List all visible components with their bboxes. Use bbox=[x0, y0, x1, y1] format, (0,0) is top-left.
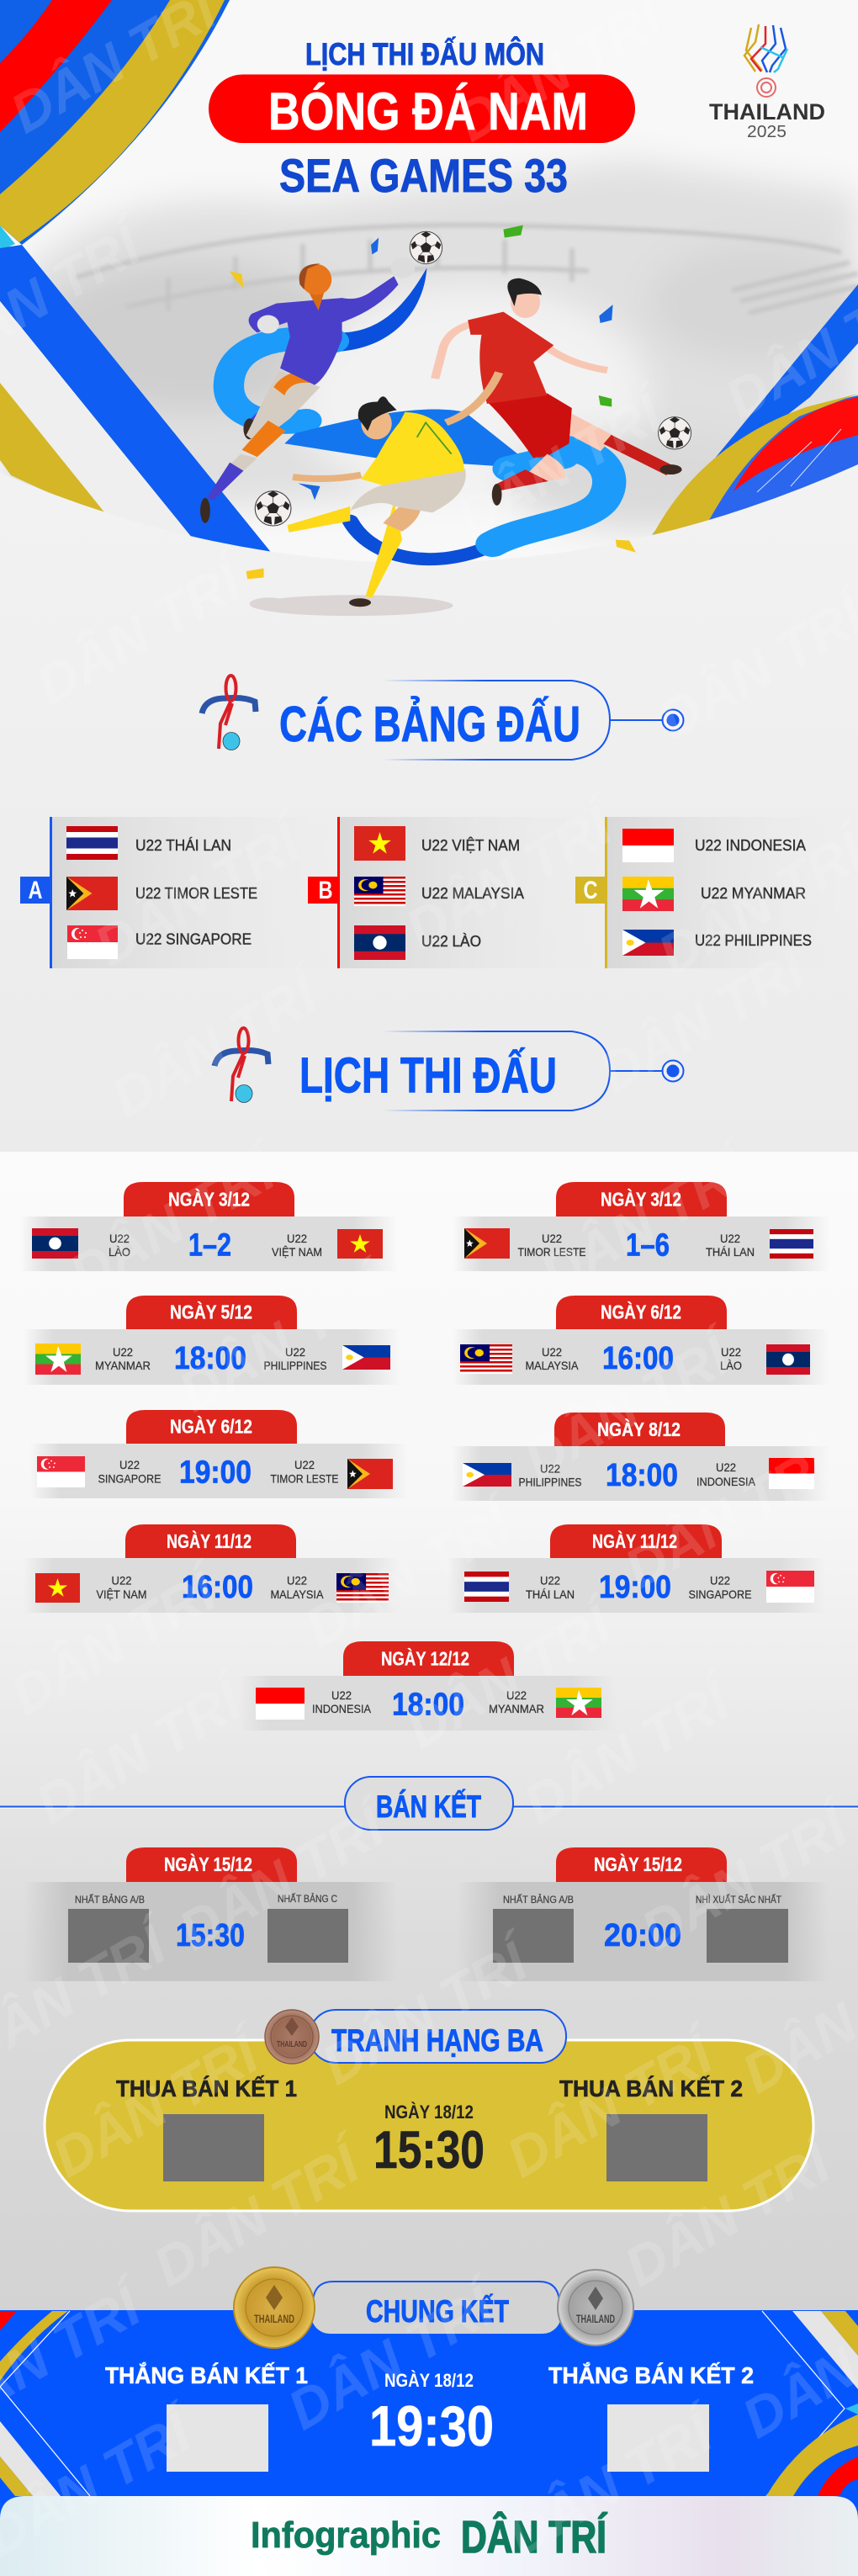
heading: các bảng đấu: CÁC BẢNG ĐẤU bbox=[279, 696, 580, 752]
panel: group A: U22 THÁI LAN bbox=[135, 837, 231, 854]
watermarks: DÂN TRÍ bbox=[614, 1429, 848, 1600]
match card: Lào vs Việt Nam: VIỆT NAM bbox=[272, 1245, 322, 1259]
match card: Việt Nam vs Malaysia: VIỆT NAM bbox=[96, 1587, 146, 1601]
kick-off time: 16:00 bbox=[602, 1341, 674, 1376]
match card: Lào vs Việt Nam: LÀO bbox=[109, 1245, 130, 1259]
final: team labels and time: 19:30 bbox=[369, 2394, 494, 2458]
kick-off time: 18:00 bbox=[174, 1341, 246, 1376]
match card: Indonesia vs Myanmar: NGÀY 12/12 bbox=[381, 1647, 469, 1669]
match card: Lào vs Việt Nam: NGÀY 3/12 bbox=[168, 1188, 250, 1210]
kick-off time: 20:00 bbox=[604, 1918, 681, 1953]
title: sea games 33: SEA GAMES 33 bbox=[279, 149, 568, 202]
confetti bbox=[230, 225, 636, 579]
heading: lịch thi đấu bbox=[214, 1028, 683, 1110]
match card: Thái Lan vs Singapore: U22 bbox=[710, 1573, 730, 1587]
team placeholder bbox=[707, 1909, 788, 1963]
match card: Timor Leste vs Thái Lan: TIMOR LESTE bbox=[518, 1245, 585, 1259]
match card: Singapore vs Timor Leste: SINGAPORE bbox=[98, 1472, 162, 1486]
match card: Malaysia vs Lào: LÀO bbox=[720, 1359, 742, 1372]
watermarks: DÂN TRÍ bbox=[278, 2271, 511, 2441]
team placeholder bbox=[607, 2404, 709, 2472]
flag: Vietnam bbox=[354, 826, 405, 861]
icon: gold medal bbox=[234, 2267, 315, 2348]
footer: Infographic bbox=[251, 2515, 441, 2556]
match card: Singapore vs Timor Leste: TIMOR LESTE bbox=[271, 1472, 338, 1486]
panel: group B bbox=[308, 817, 606, 968]
heading: tranh hạng ba bbox=[265, 2010, 566, 2064]
heading: lịch thi đấu: LỊCH THI ĐẤU bbox=[299, 1048, 557, 1104]
watermarks: DÂN TRÍ bbox=[589, 933, 823, 1104]
watermarks: DÂN TRÍ bbox=[168, 1253, 402, 1423]
icon: silver medal bbox=[558, 2270, 633, 2345]
match card: Malaysia vs Lào bbox=[453, 1296, 830, 1385]
watermarks: DÂN TRÍ bbox=[311, 1926, 545, 2096]
watermarks: DÂN TRÍ bbox=[0, 1556, 234, 1726]
icon: ribbon and ball bbox=[214, 1028, 268, 1102]
watermarks: DÂN TRÍ bbox=[294, 1488, 528, 1659]
watermarks: DÂN TRÍ bbox=[101, 958, 335, 1129]
panel: final background bbox=[0, 2310, 858, 2529]
flag: Timor Leste bbox=[464, 1228, 510, 1259]
icon: bronze medal bbox=[265, 2010, 319, 2064]
watermarks: DÂN TRÍ bbox=[25, 546, 259, 717]
match card: Malaysia vs Lào: U22 bbox=[721, 1345, 741, 1359]
header: stadium backdrop and ribbons bbox=[0, 0, 858, 552]
panel: group A: A bbox=[29, 877, 42, 904]
semifinal card 1: NGÀY 15/12 bbox=[164, 1852, 252, 1875]
flag: Singapore bbox=[766, 1571, 814, 1603]
watermarks: DÂN TRÍ bbox=[168, 1791, 402, 1962]
watermarks: DÂN TRÍ bbox=[42, 2018, 276, 2189]
match card: Thái Lan vs Singapore: NGÀY 11/12 bbox=[592, 1529, 677, 1552]
panel: third-place match: THUA BÁN KẾT 2 bbox=[559, 2075, 743, 2102]
flag: Laos bbox=[354, 925, 405, 960]
watermarks: DÂN TRÍ bbox=[513, 1665, 747, 1836]
watermarks: DÂN TRÍ bbox=[614, 2128, 848, 2298]
match card: Việt Nam vs Malaysia: U22 bbox=[287, 1573, 307, 1587]
semifinal card 1 bbox=[24, 1847, 397, 1981]
final: team labels and time bbox=[105, 2362, 754, 2472]
heading: bán kết bbox=[0, 1777, 858, 1830]
team placeholder bbox=[606, 2114, 707, 2181]
flag: Laos bbox=[766, 1344, 810, 1375]
match card: Indonesia vs Myanmar: INDONESIA bbox=[312, 1702, 372, 1715]
match card: Timor Leste vs Thái Lan: U22 bbox=[542, 1232, 562, 1245]
title pill: bóng đá nam: BÓNG ĐÁ NAM bbox=[268, 82, 588, 141]
flag: Vietnam bbox=[337, 1229, 383, 1259]
match card: Indonesia vs Myanmar: MYANMAR bbox=[489, 1702, 544, 1715]
match card: Việt Nam vs Malaysia bbox=[24, 1524, 400, 1613]
player: red shirt bbox=[435, 278, 682, 506]
watermarks: DÂN TRÍ bbox=[530, 1135, 764, 1306]
watermarks: DÂN TRÍ bbox=[84, 807, 318, 978]
match card: Philippines vs Indonesia: PHILIPPINES bbox=[518, 1476, 582, 1489]
panel: group B: U22 LÀO bbox=[421, 933, 481, 950]
icon: bronze medal: THAILAND bbox=[277, 2040, 307, 2049]
flag: Indonesia bbox=[622, 829, 674, 862]
match card: Myanmar vs Philippines bbox=[24, 1296, 401, 1385]
score: 1–6 bbox=[626, 1228, 670, 1264]
match card: Timor Leste vs Thái Lan bbox=[453, 1182, 830, 1271]
title: lịch thi đấu môn: LỊCH THI ĐẤU MÔN bbox=[305, 36, 544, 72]
panel: group C: C bbox=[584, 877, 597, 904]
flag: Malaysia bbox=[460, 1344, 512, 1374]
match card: Myanmar vs Philippines: MYANMAR bbox=[95, 1359, 151, 1372]
kick-off time: 15:30 bbox=[176, 1918, 245, 1953]
match card: Timor Leste vs Thái Lan: THÁI LAN bbox=[706, 1245, 755, 1259]
blue swoosh ribbon bbox=[229, 268, 609, 559]
kick-off time: 16:00 bbox=[182, 1570, 253, 1605]
icon: ribbon and ball bbox=[202, 676, 256, 750]
panel: group C bbox=[575, 817, 834, 968]
flag: Myanmar bbox=[556, 1688, 601, 1718]
heading: bán kết: BÁN KẾT bbox=[376, 1789, 481, 1824]
team placeholder bbox=[163, 2114, 264, 2181]
match card: Thái Lan vs Singapore bbox=[448, 1524, 825, 1613]
illustration: footballers bbox=[200, 225, 691, 616]
match card: Philippines vs Indonesia: NGÀY 8/12 bbox=[597, 1418, 681, 1440]
kick-off time: 19:00 bbox=[599, 1570, 671, 1605]
footer: DÂN TRÍ bbox=[461, 2511, 608, 2563]
semifinal card 1: NHẤT BẢNG A/B bbox=[75, 1893, 145, 1905]
match card: Myanmar vs Philippines: NGÀY 5/12 bbox=[170, 1301, 252, 1322]
flag: Malaysia bbox=[336, 1573, 389, 1603]
match card: Malaysia vs Lào: U22 bbox=[542, 1345, 562, 1359]
heading: tranh hạng ba: TRANH HẠNG BA bbox=[331, 2023, 543, 2058]
match card: Thái Lan vs Singapore: THÁI LAN bbox=[526, 1587, 575, 1601]
match card: Thái Lan vs Singapore: SINGAPORE bbox=[688, 1587, 752, 1601]
team placeholder bbox=[267, 1909, 348, 1963]
semifinal card 2 bbox=[457, 1847, 829, 1981]
watermarks: DÂN TRÍ bbox=[59, 1135, 293, 1306]
match card: Myanmar vs Philippines: U22 bbox=[285, 1345, 305, 1359]
flag: Timor Leste bbox=[347, 1459, 393, 1489]
flag: Thailand bbox=[464, 1572, 509, 1602]
panel: group C: U22 INDONESIA bbox=[695, 837, 806, 854]
match card: Myanmar vs Philippines: PHILIPPINES bbox=[264, 1359, 326, 1372]
match card: Việt Nam vs Malaysia: U22 bbox=[111, 1573, 132, 1587]
panel: group A bbox=[20, 817, 338, 968]
watermarks: DÂN TRÍ bbox=[496, 2397, 730, 2568]
page background: schedule section bbox=[0, 1152, 858, 2313]
match card: Thái Lan vs Singapore: U22 bbox=[540, 1573, 560, 1587]
match card: Philippines vs Indonesia: U22 bbox=[540, 1462, 560, 1476]
match card: Lào vs Việt Nam: U22 bbox=[109, 1232, 130, 1245]
flag: Singapore bbox=[37, 1456, 85, 1487]
watermarks: DÂN TRÍ bbox=[631, 1791, 858, 1962]
panel: group A: U22 SINGAPORE bbox=[135, 930, 252, 947]
ribbon: left diagonal bands bbox=[0, 245, 273, 555]
watermarks: DÂN TRÍ bbox=[395, 790, 629, 961]
player: goalkeeper bbox=[200, 257, 415, 523]
icon: silver medal: THAILAND bbox=[576, 2312, 615, 2325]
match card: Philippines vs Indonesia bbox=[452, 1413, 829, 1501]
flag: Philippines bbox=[463, 1463, 511, 1487]
match card: Việt Nam vs Malaysia: MALAYSIA bbox=[271, 1587, 324, 1601]
match card: Việt Nam vs Malaysia: NGÀY 11/12 bbox=[167, 1529, 252, 1552]
panel: third-place match: 15:30 bbox=[373, 2121, 485, 2180]
flag: Indonesia bbox=[769, 1458, 814, 1489]
panel: group B: B bbox=[318, 877, 333, 904]
watermarks: DÂN TRÍ bbox=[496, 2018, 730, 2189]
flag: Philippines bbox=[622, 930, 674, 956]
team placeholder bbox=[68, 1909, 149, 1963]
final: team labels and time: NGÀY 18/12 bbox=[384, 2370, 474, 2391]
match card: Indonesia vs Myanmar: U22 bbox=[506, 1688, 527, 1702]
match card: Philippines vs Indonesia: INDONESIA bbox=[696, 1475, 756, 1488]
watermarks: DÂN TRÍ bbox=[446, 378, 680, 549]
flag: Malaysia bbox=[354, 877, 405, 906]
semifinal card 2: NGÀY 15/12 bbox=[594, 1852, 682, 1875]
match card: Indonesia vs Myanmar bbox=[241, 1641, 617, 1731]
match card: Singapore vs Timor Leste bbox=[30, 1410, 408, 1498]
heading: chung kết: CHUNG KẾT bbox=[366, 2294, 509, 2329]
panel: group B: U22 MALAYSIA bbox=[421, 885, 524, 902]
match card: Malaysia vs Lào: NGÀY 6/12 bbox=[601, 1301, 681, 1322]
flag: Indonesia bbox=[256, 1688, 305, 1720]
semifinal card 1: NHẤT BẢNG C bbox=[278, 1892, 337, 1905]
final: team labels and time: THẮNG BÁN KẾT 1 bbox=[105, 2362, 308, 2388]
match card: Philippines vs Indonesia: U22 bbox=[716, 1460, 736, 1474]
watermarks: DÂN TRÍ bbox=[513, 1320, 747, 1491]
watermarks: DÂN TRÍ bbox=[395, 1589, 629, 1760]
footer bbox=[0, 2496, 858, 2576]
ground shadow bbox=[250, 595, 453, 616]
panel: third-place match bbox=[45, 2040, 813, 2211]
flag: Thailand bbox=[66, 826, 118, 860]
flag: Myanmar bbox=[35, 1344, 81, 1375]
logo: Thailand 2025: THAILAND bbox=[709, 99, 825, 125]
match card: Singapore vs Timor Leste: U22 bbox=[294, 1458, 315, 1471]
watermarks: DÂN TRÍ bbox=[25, 1665, 259, 1836]
match card: Singapore vs Timor Leste: U22 bbox=[119, 1458, 140, 1471]
match card: Myanmar vs Philippines: U22 bbox=[113, 1345, 133, 1359]
match card: Timor Leste vs Thái Lan: U22 bbox=[720, 1232, 740, 1245]
match card: Lào vs Việt Nam: U22 bbox=[287, 1232, 307, 1245]
flag: Myanmar bbox=[622, 877, 674, 911]
ribbon: right bands bbox=[651, 284, 858, 538]
footballs bbox=[255, 231, 691, 526]
flag: Thailand bbox=[770, 1229, 813, 1259]
match card: Timor Leste vs Thái Lan: NGÀY 3/12 bbox=[601, 1188, 681, 1210]
kick-off time: 18:00 bbox=[606, 1458, 678, 1493]
match card: Lào vs Việt Nam bbox=[20, 1182, 398, 1271]
kick-off time: 18:00 bbox=[392, 1688, 464, 1723]
panel: third-place match: THUA BÁN KẾT 1 bbox=[116, 2075, 297, 2102]
player: yellow shirt bbox=[288, 373, 499, 607]
score: 1–2 bbox=[188, 1228, 231, 1264]
match card: Malaysia vs Lào: MALAYSIA bbox=[525, 1359, 579, 1372]
page background: upper section bbox=[0, 0, 858, 1152]
flag: Laos bbox=[32, 1228, 78, 1259]
flag: Philippines bbox=[342, 1345, 390, 1370]
panel: third-place match: NGÀY 18/12 bbox=[384, 2102, 474, 2123]
flag: Timor Leste bbox=[66, 877, 118, 910]
semifinal card 2: NHẤT BẢNG A/B bbox=[503, 1893, 574, 1905]
watermarks: DÂN TRÍ bbox=[143, 2128, 377, 2298]
match card: Singapore vs Timor Leste: NGÀY 6/12 bbox=[170, 1415, 252, 1437]
heading: các bảng đấu bbox=[202, 676, 683, 760]
kick-off time: 19:00 bbox=[179, 1455, 252, 1491]
team placeholder bbox=[167, 2404, 268, 2472]
heading: chung kết bbox=[234, 2267, 633, 2348]
final: team labels and time: THẮNG BÁN KẾT 2 bbox=[548, 2362, 754, 2388]
panel: group A: U22 TIMOR LESTE bbox=[135, 885, 257, 902]
flag: Singapore bbox=[67, 925, 118, 959]
team placeholder bbox=[493, 1909, 574, 1963]
semifinal card 2: NHÌ XUẤT SẮC NHẤT bbox=[696, 1893, 782, 1905]
panel: group C: U22 MYANMAR bbox=[701, 885, 806, 902]
flag: Vietnam bbox=[35, 1573, 80, 1603]
icon: gold medal: THAILAND bbox=[254, 2312, 294, 2325]
panel: group B: U22 VIỆT NAM bbox=[421, 837, 520, 854]
logo: Thailand 2025: 2025 bbox=[747, 123, 786, 141]
logo: Thailand 2025 bbox=[709, 24, 825, 141]
ribbon: top-left arcs bbox=[0, 0, 230, 251]
match card: Indonesia vs Myanmar: U22 bbox=[331, 1688, 352, 1702]
panel: group C: U22 PHILIPPINES bbox=[695, 932, 812, 949]
